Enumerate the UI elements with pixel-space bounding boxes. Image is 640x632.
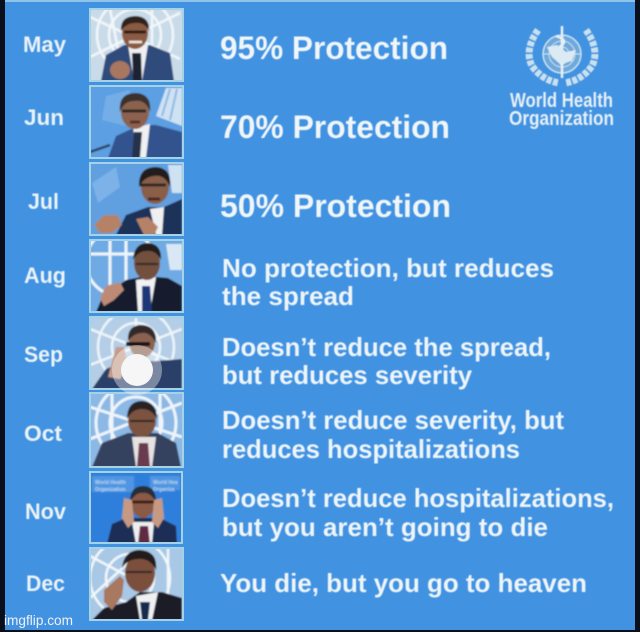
portrait May: [90, 0, 183, 81]
logo wordmark: Organization: [509, 108, 614, 130]
month labels: Nov: [25, 499, 67, 524]
portrait Nov: [90, 472, 182, 544]
protection statements: 50% Protection: [220, 188, 451, 224]
portrait Dec: [90, 538, 183, 620]
month labels: Oct: [24, 421, 63, 446]
WHO logo: [509, 26, 614, 130]
month labels: Jul: [28, 189, 59, 214]
protection statements: You die, but you go to heaven: [220, 568, 587, 598]
white play circle overlay: [112, 345, 162, 395]
protection statements: Doesn’t reduce hospitalizations,: [222, 483, 614, 513]
protection statements: 95% Protection: [220, 30, 448, 66]
logo wordmark: [509, 90, 614, 130]
protection statements: [220, 30, 614, 598]
portrait Sep: [90, 309, 183, 389]
protection statements: the spread: [222, 281, 354, 311]
portrait Aug: [89, 239, 184, 313]
protection statements: Doesn’t reduce the spread,: [222, 332, 551, 362]
protection statements: 70% Protection: [220, 109, 450, 145]
month labels: May: [23, 32, 67, 57]
month labels: [23, 32, 67, 596]
portrait Nov: World Health: [95, 480, 126, 486]
portrait Nov: Organiza: [153, 487, 175, 493]
protection statements: reduces hospitalizations: [222, 434, 520, 464]
imgflip watermark: imgflip.com: [4, 612, 73, 628]
month labels: Sep: [24, 342, 63, 367]
protection statements: No protection, but reduces: [222, 253, 554, 283]
month labels: Dec: [26, 571, 65, 596]
portrait Nov: World Hea: [153, 480, 178, 486]
icon: WHO emblem: [529, 26, 595, 83]
logo wordmark: World Health: [510, 90, 613, 112]
portrait Nov: Organization: [95, 487, 126, 493]
portrait Oct: [90, 383, 183, 467]
protection statements: but you aren’t going to die: [222, 512, 548, 542]
month labels: Jun: [24, 105, 64, 130]
protection statements: but reduces severity: [222, 360, 473, 390]
month labels: Aug: [24, 263, 66, 288]
portrait Jul: [90, 163, 183, 235]
protection statements: Doesn’t reduce severity, but: [222, 405, 564, 435]
portrait Jun: [90, 86, 183, 158]
